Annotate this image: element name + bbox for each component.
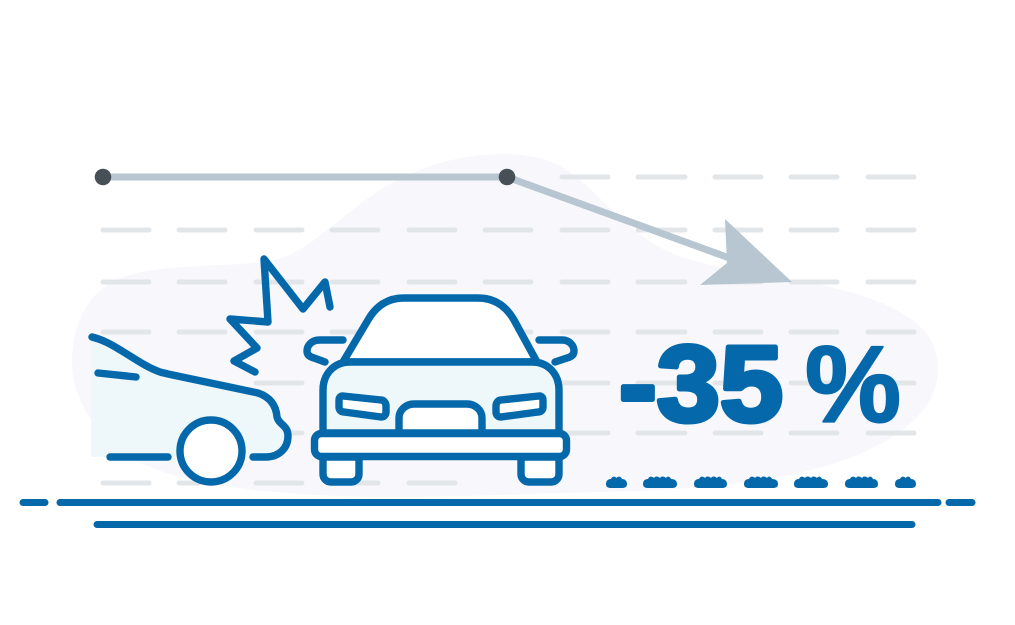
road lines (23, 502, 972, 524)
bumper (314, 434, 566, 456)
trend line (103, 177, 732, 259)
percent sign: % (805, 324, 901, 446)
mid point (499, 169, 515, 185)
icon: car front view (307, 298, 574, 482)
left wheel (323, 457, 359, 482)
value: -35 (619, 323, 783, 444)
wheel (180, 420, 242, 482)
windshield and roof (343, 298, 537, 362)
icon: crashing car side view (91, 337, 288, 482)
window line (98, 373, 136, 377)
left mirror (307, 340, 343, 362)
grille (399, 404, 482, 433)
declining trend arrow (95, 169, 792, 285)
icon: impact burst (230, 259, 330, 372)
start point (95, 169, 111, 185)
right headlight (496, 396, 543, 417)
dashed grid lines (103, 177, 914, 483)
grass tufts (606, 476, 916, 488)
right wheel (521, 457, 559, 482)
statistic: minus 35 percent (619, 323, 901, 446)
background blob (72, 154, 938, 497)
motion line (110, 453, 168, 461)
hood outline (92, 337, 288, 457)
left headlight (339, 396, 386, 417)
car body fill (91, 337, 288, 457)
right mirror (539, 340, 574, 362)
arrow head (700, 219, 792, 285)
car front body (323, 362, 559, 433)
